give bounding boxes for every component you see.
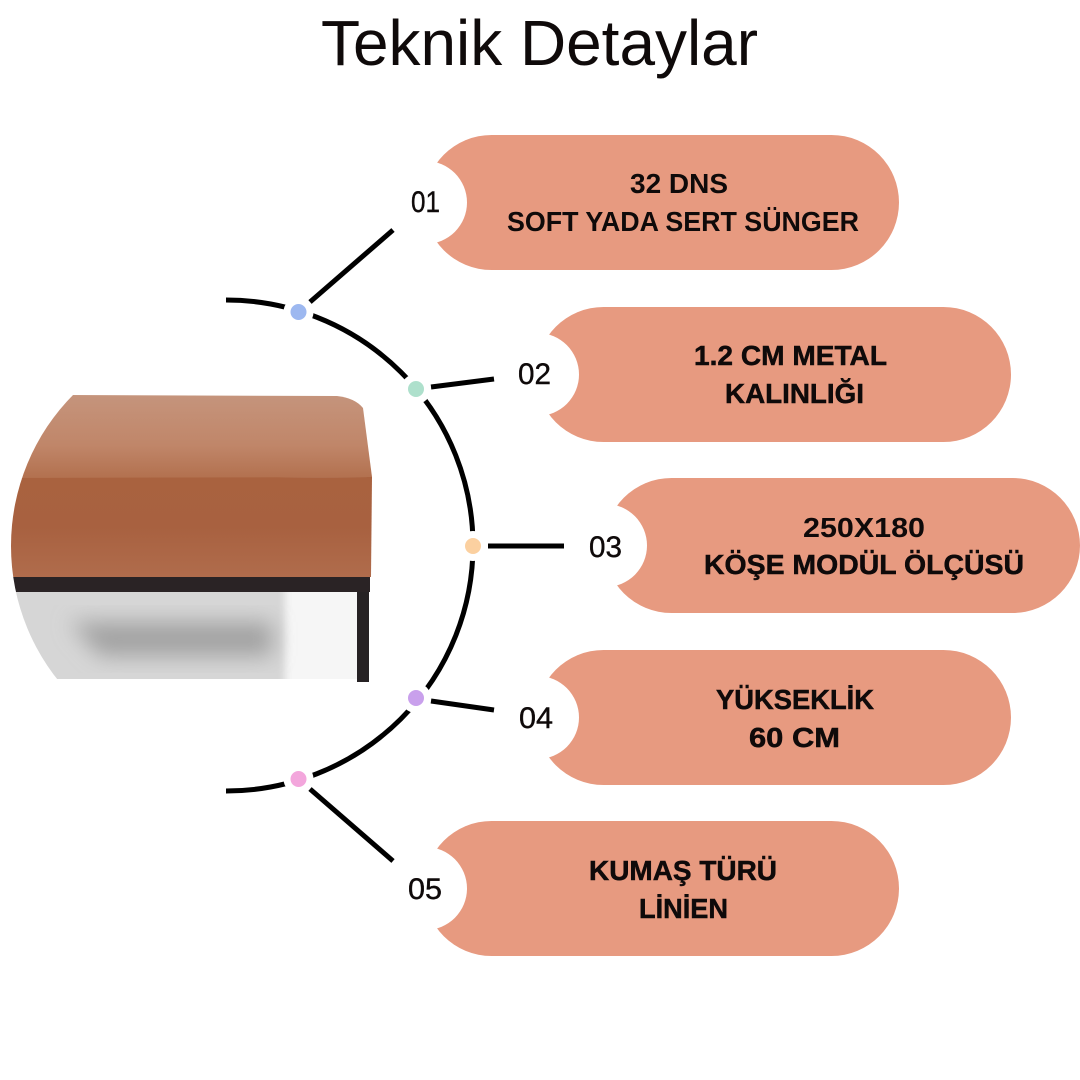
panel 04: height: YÜKSEKLİK xyxy=(716,684,874,715)
panel 03: module size: KÖŞE MODÜL ÖLÇÜSÜ xyxy=(704,549,1024,580)
dot 1 blue xyxy=(284,297,314,327)
panel 02: metal thickness: 02 xyxy=(518,358,551,391)
dot 4 purple xyxy=(401,683,431,713)
panel 01: foam: SOFT YADA SERT SÜNGER xyxy=(507,206,859,237)
panel 04: height: 60 CM xyxy=(749,722,840,753)
dot 5 pink xyxy=(284,764,314,794)
connector 3 xyxy=(488,544,564,548)
dot 2 green xyxy=(401,374,431,404)
dot 3 orange xyxy=(458,531,488,561)
panel 02: metal thickness xyxy=(496,307,1011,442)
panel 05: fabric: 05 xyxy=(408,873,442,906)
connector 5 xyxy=(310,789,393,861)
panel 04: height xyxy=(496,650,1011,785)
panel 04: height: 04 xyxy=(519,702,553,735)
title: Teknik Detaylar xyxy=(321,7,758,79)
metal leg xyxy=(357,592,369,682)
metal frame xyxy=(5,577,370,592)
panel 02: metal thickness: KALINLIĞI xyxy=(725,378,864,409)
panel 01: foam: 01 xyxy=(411,186,440,219)
cushion top xyxy=(10,395,372,479)
panel 03: module size: 03 xyxy=(589,531,622,564)
cushion front xyxy=(5,477,372,577)
product photo: ottoman xyxy=(0,395,372,690)
curved arc xyxy=(226,300,473,791)
connector 2 xyxy=(431,379,494,387)
panel 05: fabric: LİNİEN xyxy=(639,893,728,924)
panel 03: module size xyxy=(564,478,1080,613)
connector 1 xyxy=(310,230,393,302)
connector 4 xyxy=(431,701,494,710)
panel 01: foam xyxy=(384,135,899,270)
panel 05: fabric xyxy=(384,821,899,956)
panel 03: module size: 250X180 xyxy=(803,512,925,543)
panel 05: fabric: KUMAŞ TÜRÜ xyxy=(589,855,777,886)
floor and shadow xyxy=(16,592,357,679)
panel 02: metal thickness: 1.2 CM METAL xyxy=(694,340,887,371)
panel 01: foam: 32 DNS xyxy=(630,168,728,199)
